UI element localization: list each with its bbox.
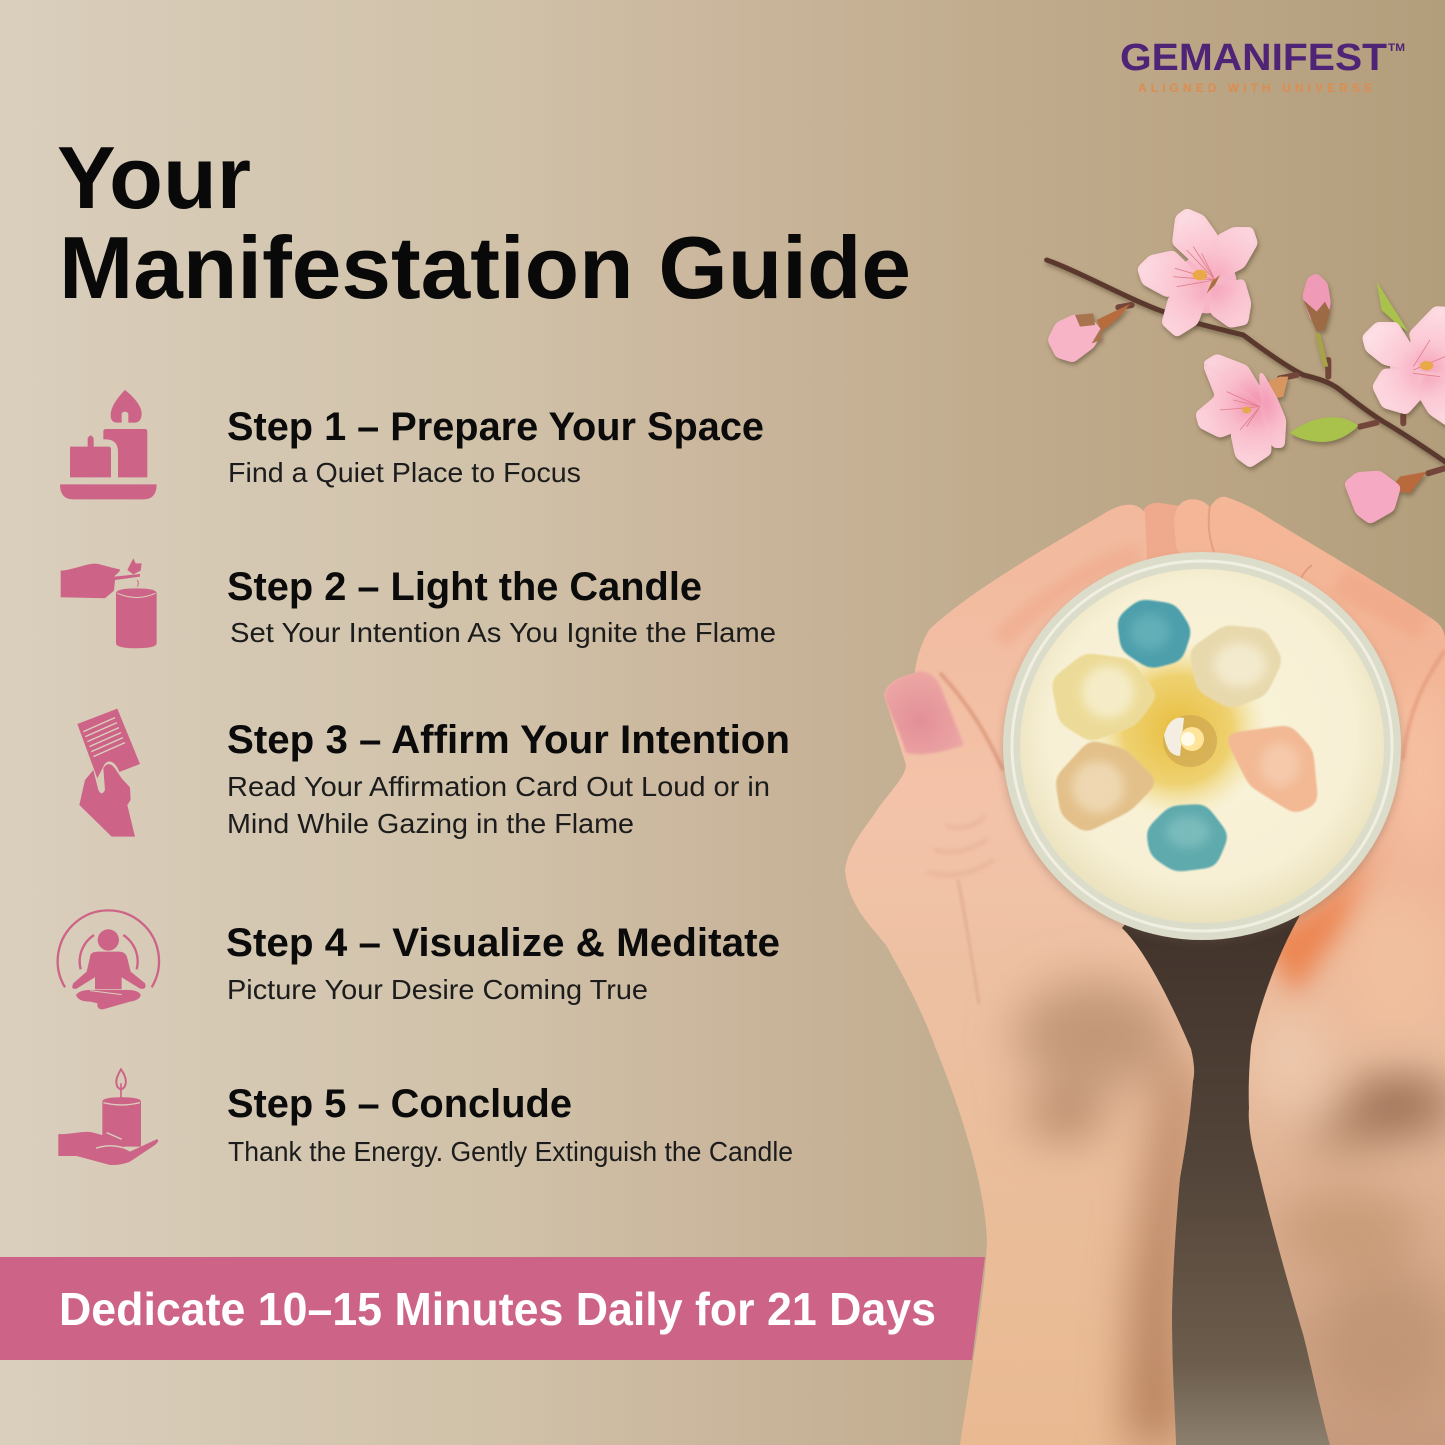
bud: top [1303, 274, 1330, 367]
logo: TM [1388, 42, 1405, 54]
icon: hand holding affirmation card [77, 709, 140, 837]
step 1 [60, 390, 764, 499]
icon: candles on tray [60, 390, 157, 499]
step 3 [77, 709, 790, 839]
left hand shading [1015, 980, 1195, 1445]
title: Manifestation Guide [59, 218, 911, 317]
icon: lighting candle [61, 558, 157, 648]
logo: GEMANIFEST [1120, 37, 1387, 79]
flame [1163, 715, 1217, 767]
candle glow on palm [1270, 858, 1376, 1000]
logo [1120, 37, 1405, 95]
candle [1003, 552, 1401, 941]
left hand [845, 504, 1194, 1445]
step 4 [58, 910, 780, 1009]
stone: teal bottom [1147, 805, 1228, 871]
stone: pale quartz [1190, 626, 1282, 708]
step 5 [58, 1069, 793, 1167]
step 4 heading: Step 4 – Visualize & Meditate [226, 921, 780, 965]
step 2 heading: Step 2 – Light the Candle [227, 565, 702, 609]
icon: meditating person [58, 910, 159, 1009]
stone: citrine [1052, 654, 1157, 741]
step 5 heading: Step 5 – Conclude [227, 1082, 572, 1126]
right hand shading [1265, 680, 1445, 1410]
title: Your [57, 128, 251, 227]
leaf [1290, 417, 1358, 442]
step 2 [61, 558, 776, 648]
step 1 description: Find a Quiet Place to Focus [228, 457, 581, 488]
step 1 heading: Step 1 – Prepare Your Space [227, 405, 764, 449]
title [57, 128, 911, 317]
fingers behind candle [1143, 503, 1180, 565]
step 4 description: Picture Your Desire Coming True [227, 974, 648, 1005]
step 2 description: Set Your Intention As You Ignite the Flame [230, 617, 776, 648]
step 3 description: Read Your Affirmation Card Out Loud or in [227, 771, 770, 802]
melted wax [1088, 640, 1268, 820]
step 3 description [227, 771, 770, 839]
blossom: top [1138, 209, 1257, 336]
twigs [1118, 305, 1445, 473]
right hand [1160, 480, 1445, 1445]
step 5 description: Thank the Energy. Gently Extinguish the Candle [228, 1136, 793, 1167]
step 3 description: Mind While Gazing in the Flame [227, 808, 634, 839]
icon: hand holding candle [58, 1069, 158, 1165]
bud: lower right [1345, 472, 1427, 523]
banner: Dedicate 10–15 Minutes Daily for 21 Days [59, 1283, 936, 1335]
photo: cherry blossom branch [1047, 209, 1445, 523]
blossom: middle [1197, 355, 1288, 467]
left finger shading [1000, 555, 1140, 640]
logo: ALIGNED WITH UNIVERSE [1138, 81, 1372, 95]
branch [1047, 260, 1445, 465]
stone: teal top [1118, 600, 1191, 668]
thumbnail [884, 671, 964, 754]
stone: amber [1056, 741, 1157, 832]
blossom: right [1363, 282, 1445, 440]
gap between forearms [1100, 905, 1340, 1445]
step 3 heading: Step 3 – Affirm Your Intention [227, 718, 790, 762]
banner [0, 1257, 985, 1360]
bud: left [1048, 304, 1130, 362]
photo: hands holding candle [820, 480, 1445, 1445]
stone: peach [1225, 726, 1317, 813]
